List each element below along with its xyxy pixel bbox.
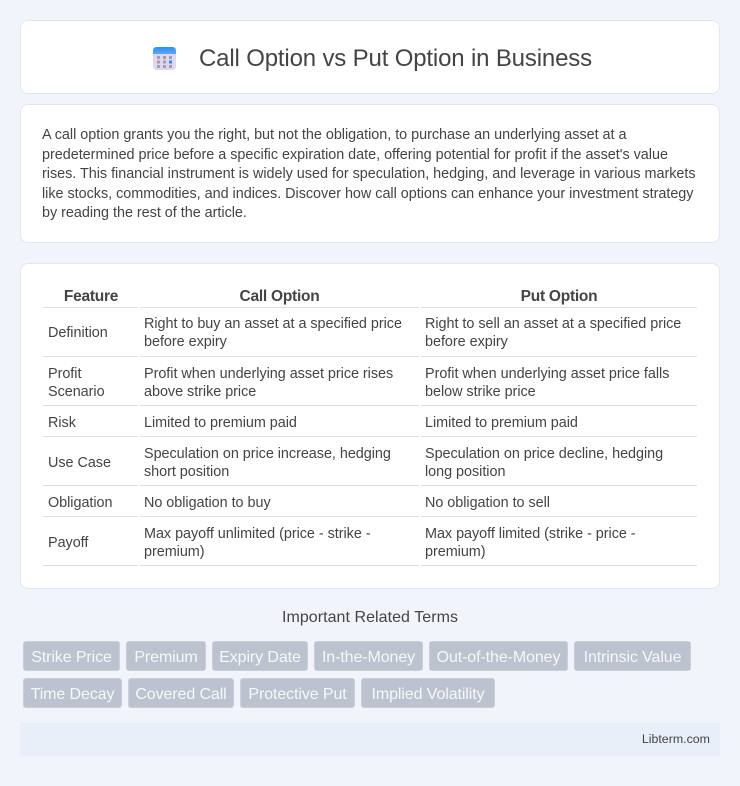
comparison table panel: No obligation to buy xyxy=(144,495,271,511)
comparison table panel: short position xyxy=(144,464,229,480)
tag: Covered Call xyxy=(135,686,227,703)
row: Profit Scenario: Profit xyxy=(48,366,81,382)
row: Definition: Definition xyxy=(48,325,108,341)
tag: Time Decay xyxy=(31,686,114,703)
row: Use Case: Use Case xyxy=(48,455,111,471)
comparison table panel: premium) xyxy=(425,544,486,560)
tag: Strike Price xyxy=(31,649,112,666)
row: Profit Scenario xyxy=(48,366,105,400)
tag xyxy=(212,641,308,671)
tag: Premium xyxy=(134,649,198,666)
tag xyxy=(429,641,568,671)
intro paragraph: by reading the rest of the article. xyxy=(42,205,247,221)
tag xyxy=(23,678,122,708)
tag: Out-of-the-Money xyxy=(437,649,560,666)
comparison table panel: Right to buy an asset at a specified price xyxy=(144,316,402,332)
comparison table panel: Speculation on price decline, hedging xyxy=(425,446,663,462)
table header: Feature: Feature xyxy=(64,288,118,305)
comparison table panel: long position xyxy=(425,464,505,480)
comparison table panel: Max payoff unlimited (price - strike - xyxy=(144,526,371,542)
tag xyxy=(128,678,234,708)
comparison table panel: Limited to premium paid xyxy=(425,415,578,431)
comparison table panel: Right to sell an asset at a specified price xyxy=(425,316,681,332)
comparison table panel: Limited to premium paid xyxy=(144,415,297,431)
comparison table panel: before expiry xyxy=(144,334,227,350)
table header: Put Option: Put Option xyxy=(521,288,597,305)
comparison table panel: before expiry xyxy=(425,334,508,350)
intro paragraph: like stocks, commodities, and indices. Discover how call options can enhance your investment strategy xyxy=(42,186,693,202)
comparison table panel: above strike price xyxy=(144,384,256,400)
intro paragraph: rises. This financial instrument is widely used for speculation, hedging, and leverage in various markets xyxy=(42,166,696,182)
tag: Protective Put xyxy=(248,686,347,703)
tag: Expiry Date xyxy=(219,649,301,666)
comparison table panel: Profit when underlying asset price falls xyxy=(425,366,669,382)
comparison table panel: below strike price xyxy=(425,384,536,400)
comparison table panel: No obligation to sell xyxy=(425,495,550,511)
intro paragraph xyxy=(42,127,696,221)
tag: Intrinsic Value xyxy=(584,649,681,666)
comparison table panel: Profit when underlying asset price rises xyxy=(144,366,393,382)
footer credit: Libterm.com xyxy=(642,732,710,746)
tag xyxy=(240,678,355,708)
comparison table panel xyxy=(20,263,720,589)
related terms heading: Important Related Terms xyxy=(282,609,458,626)
tag xyxy=(574,641,691,671)
related term tags xyxy=(23,641,691,708)
tag: Implied Volatility xyxy=(372,686,484,703)
tag xyxy=(126,641,206,671)
icon: calendar xyxy=(153,47,176,70)
intro paragraph: A call option grants you the right, but not the obligation, to purchase an underlying asset at a xyxy=(42,127,626,143)
intro text panel xyxy=(20,104,720,243)
tag xyxy=(314,641,423,671)
tag xyxy=(361,678,495,708)
row: Risk: Risk xyxy=(48,415,76,431)
row: Obligation: Obligation xyxy=(48,495,113,511)
comparison table panel: Max payoff limited (strike - price - xyxy=(425,526,636,542)
footer bar xyxy=(20,723,720,756)
row: Payoff: Payoff xyxy=(48,535,88,551)
table header: Call Option: Call Option xyxy=(240,288,319,305)
intro paragraph: predetermined price before a specific expiration date, offering potential for profit if the asset's value xyxy=(42,146,668,162)
header panel xyxy=(20,20,720,94)
tag xyxy=(23,641,120,671)
row: Profit Scenario: Scenario xyxy=(48,384,105,400)
comparison table panel: premium) xyxy=(144,544,205,560)
title: Call Option vs Put Option in Business xyxy=(199,45,592,72)
comparison table panel: Speculation on price increase, hedging xyxy=(144,446,391,462)
tag: In-the-Money xyxy=(322,649,415,666)
